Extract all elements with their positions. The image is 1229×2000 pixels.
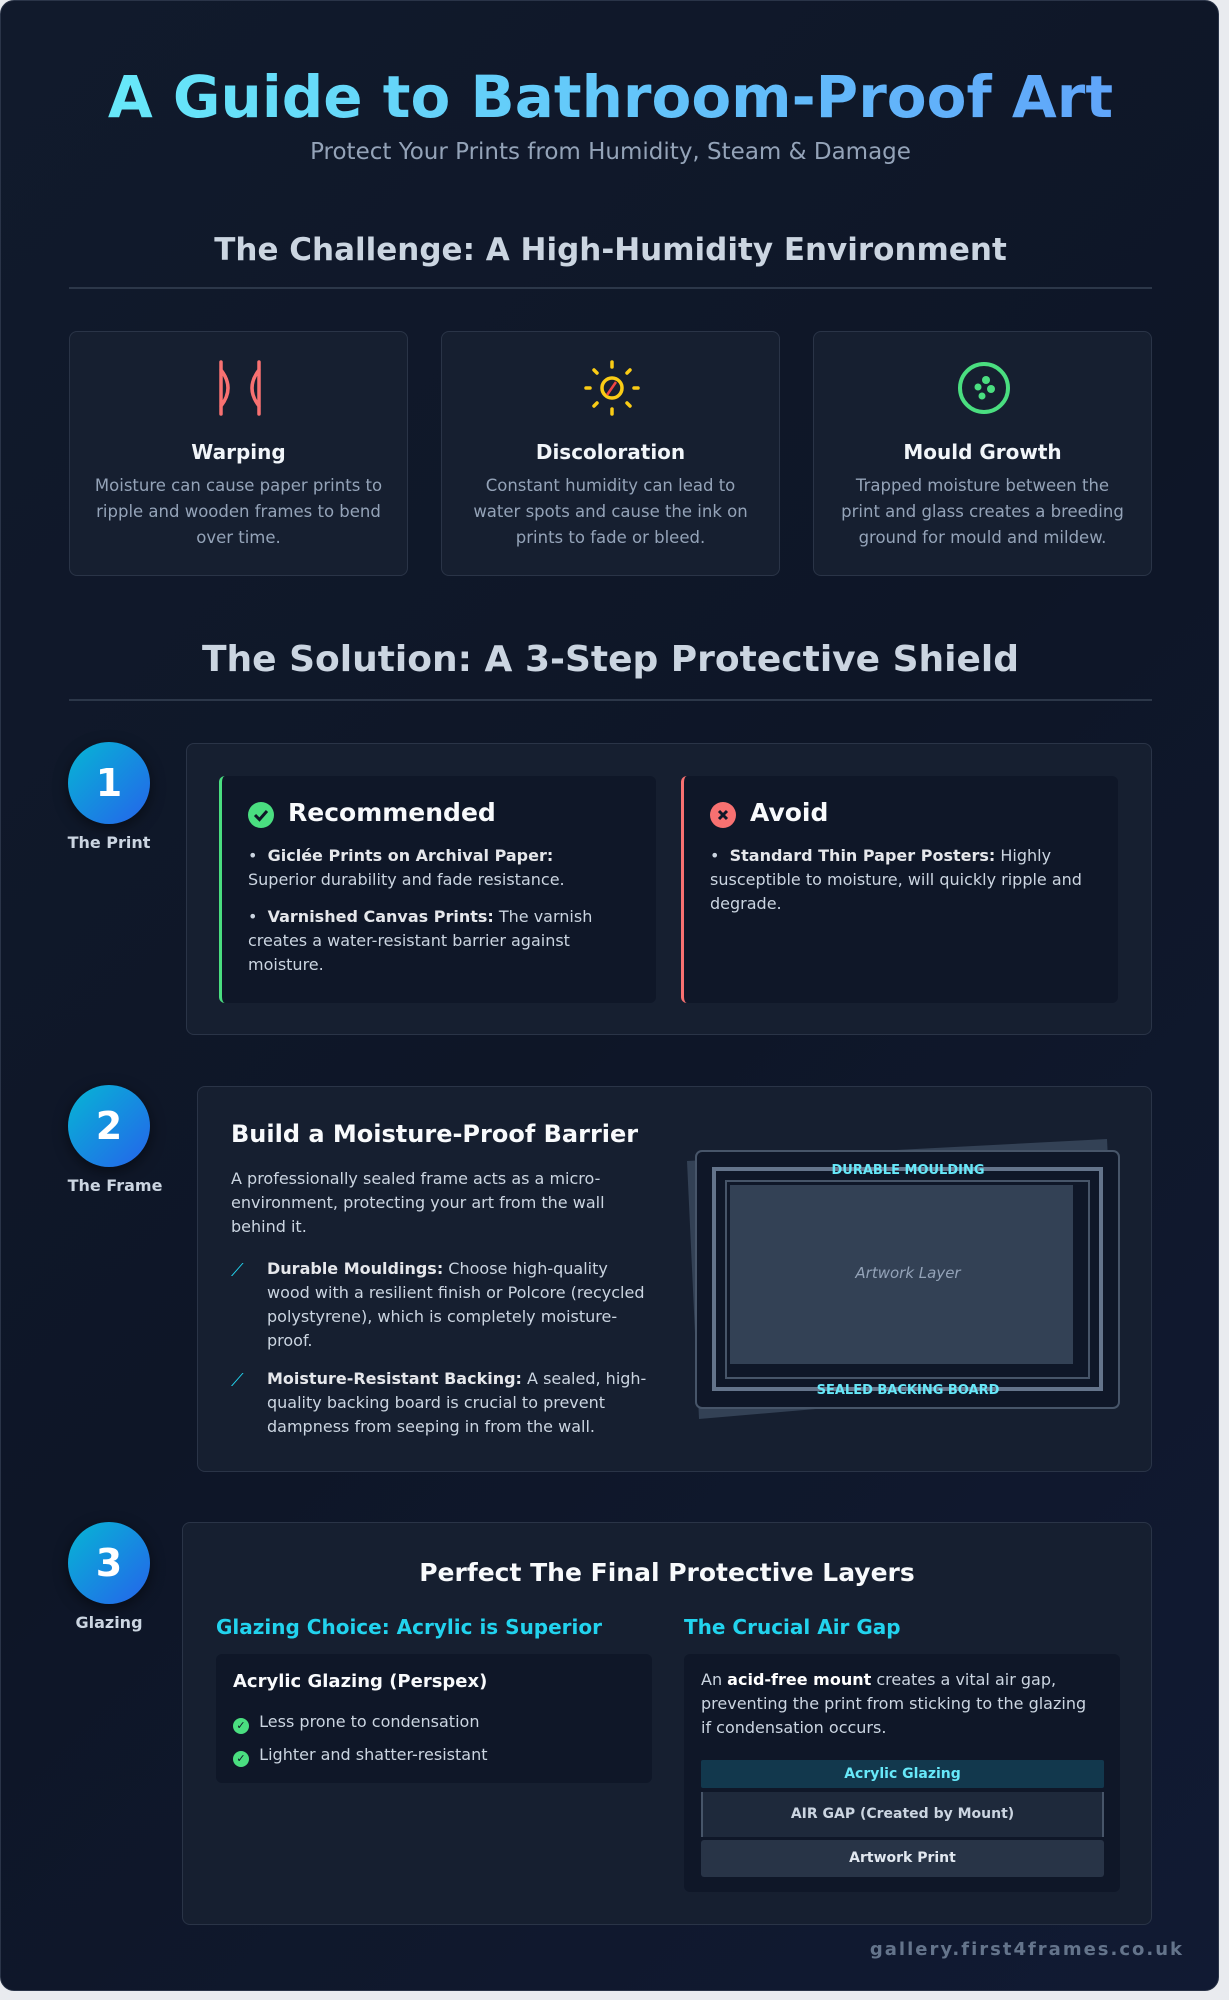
acrylic box: Less prone to condensation xyxy=(259,1712,479,1731)
avoid box: • Standard Thin Paper Posters: Highly susceptible to moisture, will quickly ripple and degrade. xyxy=(710,846,1082,913)
step 3 badge xyxy=(67,1522,151,1632)
heading: solution: The Solution: A 3-Step Protective Shield xyxy=(202,639,1019,680)
panel: the frame: Durable Mouldings: Choose high-quality wood with a resilient finish or Polcore (recycled polystyrene), which is completely moisture-proof. xyxy=(267,1259,644,1350)
step 1 badge: 1 xyxy=(96,761,122,805)
panel: the frame: A professionally sealed frame acts as a micro-environment, protecting your art from the wall behind it. xyxy=(231,1169,605,1236)
panel: glazing xyxy=(182,1522,1152,1925)
title: A Guide to Bathroom-Proof Art xyxy=(108,63,1113,131)
bullet: mouldings xyxy=(231,1259,644,1350)
heading: challenge: The Challenge: A High-Humidity Environment xyxy=(214,232,1007,268)
acrylic box xyxy=(216,1654,652,1783)
recommended box: • Varnished Canvas Prints: The varnish creates a water-resistant barrier against moisture. xyxy=(248,907,592,974)
panel: glazing: Glazing Choice: Acrylic is Superior xyxy=(216,1615,602,1639)
icon: sun xyxy=(584,360,640,416)
air gap box: AIR GAP (Created by Mount) xyxy=(791,1806,1014,1822)
icon: mould xyxy=(958,362,1010,414)
panel: the frame xyxy=(197,1086,1152,1472)
panel: glazing: The Crucial Air Gap xyxy=(684,1615,901,1639)
card: warping: Warping xyxy=(191,440,286,464)
card: mould: Mould Growth xyxy=(903,440,1062,464)
step 2 badge: 2 xyxy=(96,1104,122,1148)
step 2 badge: The Frame xyxy=(68,1176,162,1195)
card: mould xyxy=(813,331,1152,576)
step 3 badge: Glazing xyxy=(75,1613,143,1632)
frame diagram: Artwork Layer xyxy=(854,1264,961,1282)
subtitle: Protect Your Prints from Humidity, Steam & Damage xyxy=(310,139,911,165)
card: mould: Trapped moisture between the print and glass creates a breeding ground for mould and mildew. xyxy=(841,476,1124,547)
panel: the frame: ⟋ xyxy=(231,1260,244,1281)
frame diagram: DURABLE MOULDING xyxy=(831,1163,985,1178)
acrylic box: Acrylic Glazing (Perspex) xyxy=(233,1671,487,1692)
panel: the frame: Build a Moisture-Proof Barrier xyxy=(231,1120,638,1148)
step 2 badge xyxy=(66,1085,162,1195)
panel: the frame: ⟋ xyxy=(231,1370,244,1391)
air gap box: Artwork Print xyxy=(849,1850,956,1866)
avoid box: Avoid xyxy=(750,798,828,827)
air gap box: Acrylic Glazing xyxy=(844,1766,961,1782)
panel: the print xyxy=(186,743,1152,1035)
air gap box xyxy=(684,1654,1120,1892)
card: warping: Moisture can cause paper prints to ripple and wooden frames to bend over time. xyxy=(95,476,382,547)
icon: warping xyxy=(219,360,261,416)
footer: gallery.first4frames.co.uk xyxy=(870,1939,1184,1960)
acrylic box: Lighter and shatter-resistant xyxy=(259,1745,487,1764)
avoid box xyxy=(681,776,1118,1003)
card: discoloration: Constant humidity can lead to water spots and cause the ink on prints to fade or bleed. xyxy=(473,476,748,547)
card: discoloration: Discoloration xyxy=(536,440,685,464)
frame diagram: SEALED BACKING BOARD xyxy=(817,1383,1000,1398)
frame diagram xyxy=(687,1139,1120,1419)
acrylic box: ✓ xyxy=(236,1752,246,1765)
step 3 badge: 3 xyxy=(96,1541,122,1585)
step 1 badge: The Print xyxy=(68,833,150,852)
air gap box: An acid-free mount creates a vital air gap, preventing the print from sticking to the glazing if condensation occurs. xyxy=(701,1670,1086,1737)
acrylic box: ✓ xyxy=(236,1719,246,1732)
panel: glazing: Perfect The Final Protective Layers xyxy=(419,1558,915,1587)
recommended box xyxy=(219,776,656,1003)
recommended box: Recommended xyxy=(288,798,496,827)
recommended box: • Giclée Prints on Archival Paper: Superior durability and fade resistance. xyxy=(248,846,565,889)
card: discoloration xyxy=(441,331,780,576)
panel: the frame: Moisture-Resistant Backing: A sealed, high-quality backing board is crucial to prevent dampness from seeping in from the wall. xyxy=(267,1369,646,1436)
bullet: backing xyxy=(231,1369,646,1436)
step 1 badge xyxy=(66,742,152,852)
card: warping xyxy=(69,331,408,576)
